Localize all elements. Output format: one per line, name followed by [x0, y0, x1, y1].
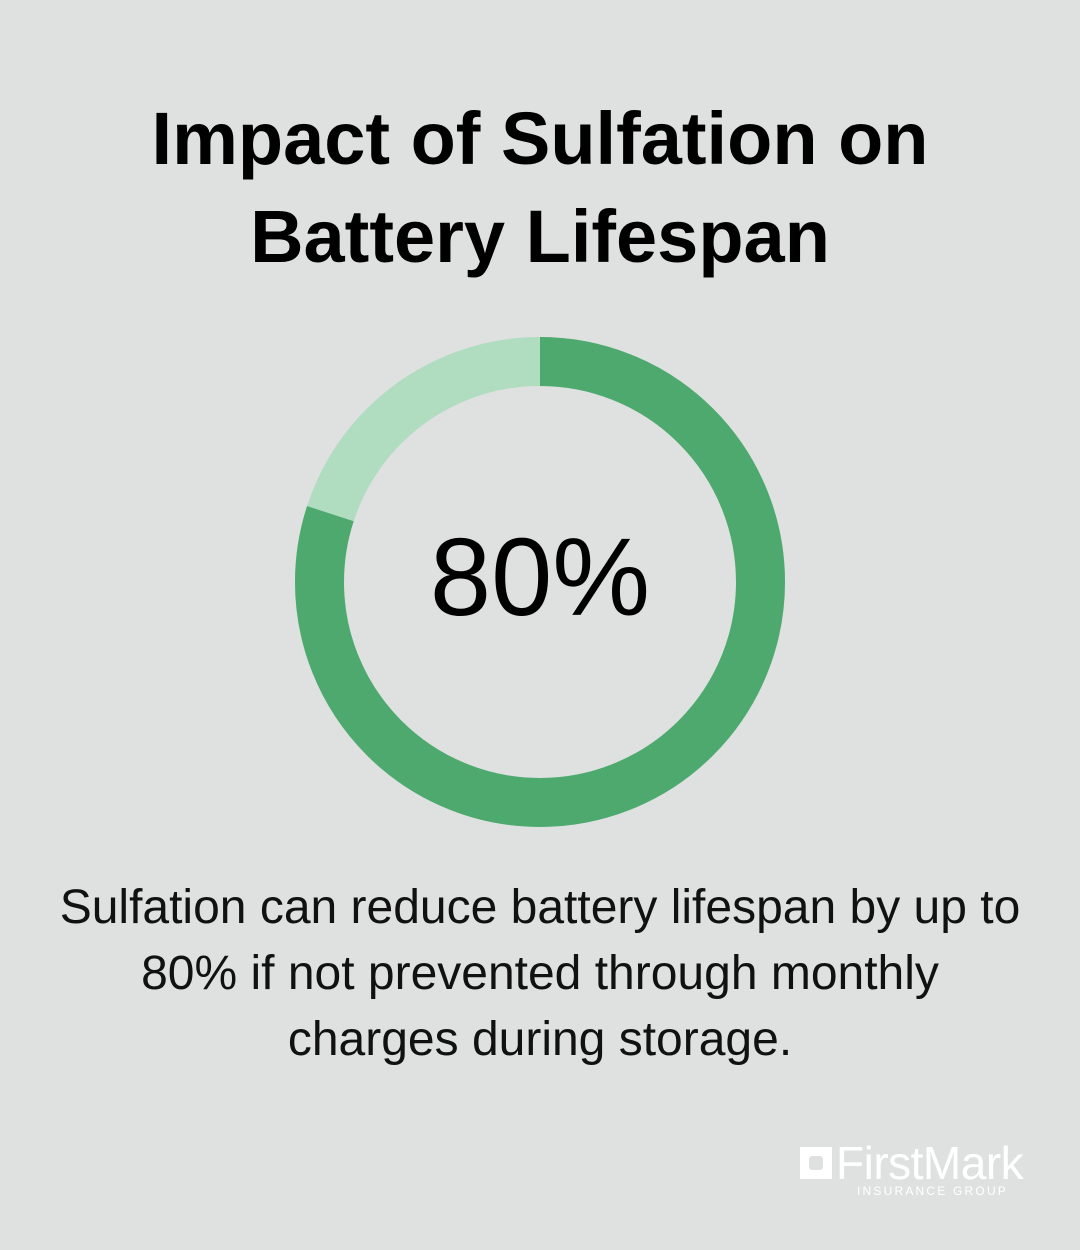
description text: Sulfation can reduce battery lifespan by up to — [60, 881, 1020, 934]
center value: 80% — [430, 516, 650, 639]
logo icon — [800, 1147, 832, 1179]
title: Impact of Sulfation on — [152, 97, 928, 180]
logo tagline: INSURANCE GROUP — [857, 1184, 1008, 1198]
logo wordmark: FirstMark — [836, 1137, 1023, 1189]
title: Battery Lifespan — [250, 195, 830, 278]
donut value segment 80% — [320, 362, 760, 802]
description text: 80% if not prevented through monthly — [141, 947, 939, 1000]
donut remainder segment — [320, 362, 760, 802]
description text: charges during storage. — [288, 1013, 792, 1066]
description text — [60, 881, 1020, 1066]
logo — [800, 1137, 1024, 1198]
title — [152, 97, 928, 278]
